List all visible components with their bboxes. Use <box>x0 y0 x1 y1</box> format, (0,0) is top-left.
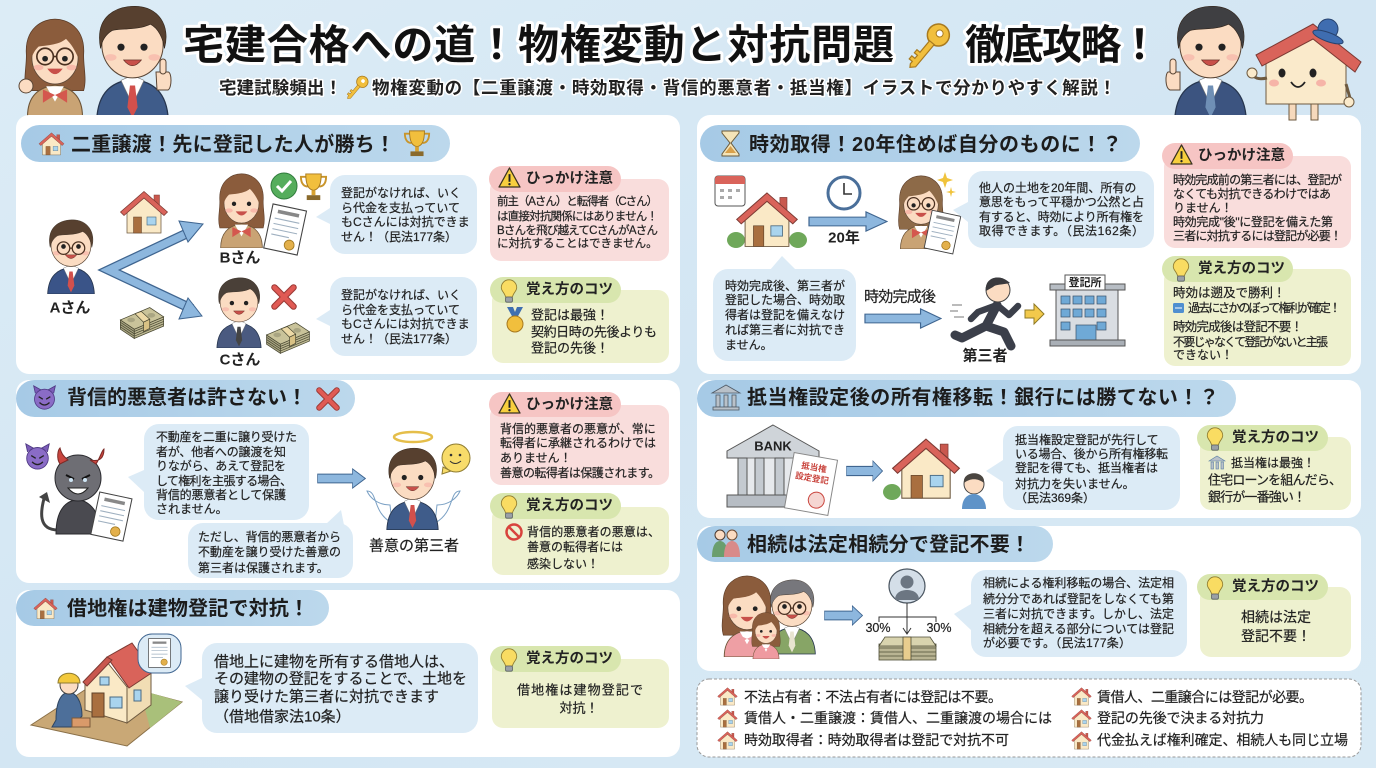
callout: memory tip: 背信的悪意者の悪意は、 <box>527 524 660 539</box>
speech bubble: exception <box>188 510 353 578</box>
callout: caution: なくても対抗できるわけではあ <box>1173 187 1331 201</box>
illustration: devil with certificate <box>26 444 132 541</box>
callout: memory tip: 借地権は建物登記で <box>517 682 643 698</box>
callout: memory tip <box>490 277 669 363</box>
speech bubble: inheritance rule: 相続による権利移転の場合、法定相 <box>983 575 1174 590</box>
callout: caution: 善意の転得者は保護されます。 <box>500 465 660 480</box>
title: 宅建合格への道！物権変動と対抗問題 <box>183 22 894 68</box>
callout: caution <box>489 166 669 261</box>
speech bubble: mortgage rule: （民法369条） <box>1015 491 1095 505</box>
speech bubble: bad-faith rule: 者が、他者への譲渡を知 <box>156 444 286 459</box>
speech bubble: mortgage rule: 抵当権設定登記が先行して <box>1015 432 1159 447</box>
callout: memory tip: 感染しない！ <box>527 556 599 571</box>
subtitle <box>219 74 1116 103</box>
diagram: statutory shares: 30% <box>926 621 952 635</box>
panel: summary list <box>697 679 1361 757</box>
icon: family <box>712 530 740 557</box>
list: left column <box>718 688 1052 749</box>
heading: inheritance <box>697 526 1053 562</box>
subtitle: 宅建試験頻出！ <box>219 78 342 98</box>
icon: smiling speech balloon <box>442 444 470 474</box>
speech bubble B: せん！（民法177条） <box>341 230 457 244</box>
illustration: worker and house on land <box>31 634 182 746</box>
heading: bad-faith party <box>16 380 355 417</box>
illustration: angel third party <box>367 432 470 554</box>
list: left column: 賃借人・二重譲渡：賃借人、二重譲渡の場合には <box>744 710 1052 726</box>
speech bubble: land lease rule: 借地上に建物を所有する借地人は、 <box>214 654 454 670</box>
speech bubble: bad-faith rule: りながら、あえて登記を <box>156 458 286 473</box>
icon: prohibited <box>506 524 522 540</box>
illustration: registry office <box>1050 275 1125 346</box>
illustration: mortgage document: 設定登記 <box>794 470 830 486</box>
arrow: to third party <box>865 309 941 328</box>
callout: caution <box>489 392 669 485</box>
subtitle: 物権変動の【二重譲渡・時効取得・背信的悪意者・抵当権】イラストで分かりやすく解説！ <box>372 78 1116 98</box>
speech bubble: land lease rule: 譲り受けた第三者に対抗できます <box>214 688 439 706</box>
diagram: statutory shares: 30% <box>865 621 891 635</box>
illustration: bank building: BANK <box>754 438 792 454</box>
callout: caution: 三者に対抗するには登記が必要！ <box>1173 228 1342 243</box>
speech bubble C: ら代金を支払っていて <box>341 303 460 317</box>
panel: mortgage <box>697 380 1361 518</box>
callout: memory tip: 覚え方のコツ <box>1232 577 1319 595</box>
arrow: bad-faith to third party <box>318 469 365 488</box>
callout: memory tip <box>490 493 669 575</box>
title: 徹底攻略！ <box>965 22 1160 68</box>
label: third party: 第三者 <box>962 346 1008 364</box>
speech bubble C: 登記がなければ、いく <box>341 287 461 302</box>
speech bubble: third party <box>713 256 856 361</box>
callout: caution: ありません！ <box>500 451 572 465</box>
speech bubble B <box>316 175 477 254</box>
panel: land lease <box>16 590 680 757</box>
callout: memory tip: 銀行が一番強い！ <box>1208 490 1306 504</box>
title <box>183 20 1160 75</box>
person B with certificate <box>219 173 326 266</box>
person A <box>48 220 94 316</box>
heading: land lease: 借地権は建物登記で対抗！ <box>67 597 309 620</box>
callout: caution: は直接対抗関係にはありません！ <box>497 209 658 223</box>
callout: memory tip <box>1197 574 1351 657</box>
speech bubble: third party: 登記した場合、時効取 <box>725 292 845 307</box>
heading: inheritance: 相続は法定相続分で登記不要！ <box>747 533 1030 556</box>
icon: key <box>902 20 954 75</box>
heading: land lease <box>16 590 329 626</box>
speech bubble: bad-faith rule <box>128 424 309 520</box>
speech bubble: third party: れば第三者に対抗でき <box>725 323 845 337</box>
heading: mortgage <box>697 380 1236 417</box>
panel: inheritance <box>697 526 1361 671</box>
callout: memory tip: 登記の先後！ <box>531 340 609 356</box>
speech bubble: land lease rule <box>185 643 478 733</box>
speech bubble: inheritance rule <box>954 570 1187 657</box>
speech bubble: land lease rule: （借地借家法10条） <box>214 708 351 726</box>
icon: clock <box>828 177 860 209</box>
diagram: statutory shares <box>865 569 952 660</box>
panel: prescription <box>697 115 1361 374</box>
person C with money <box>217 278 309 368</box>
speech bubble: prescription rule: 取得できます。（民法162条） <box>979 223 1144 238</box>
person C with money: Cさん <box>220 352 260 368</box>
list: left column: 不法占有者：不法占有者には登記は不要。 <box>744 689 1002 705</box>
callout: caution: ひっかけ注意 <box>1198 146 1285 164</box>
speech bubble: bad-faith rule: 不動産を二重に譲り受けた <box>156 430 297 444</box>
illustration: running third party <box>950 277 1018 346</box>
callout: certificate bubble <box>138 634 181 673</box>
speech bubble: third party: 得者は登記を備えなけ <box>725 307 845 322</box>
icon: small bank <box>1209 456 1225 469</box>
icon: house <box>120 192 168 233</box>
callout: memory tip: 時効は遡及で勝利！ <box>1173 285 1286 300</box>
speech bubble C: もCさんには対抗できま <box>341 317 470 331</box>
callout: caution: ひっかけ注意 <box>526 169 613 187</box>
list: right column: 代金払えば権利確定、相続人も同じ立場 <box>1097 732 1348 748</box>
icon: medal <box>507 307 523 332</box>
icon: money stack <box>879 637 936 660</box>
speech bubble B: もCさんには対抗できま <box>341 215 470 229</box>
callout: memory tip: 契約日時の先後よりも <box>531 324 657 340</box>
illustration: businessman at top right <box>1166 6 1246 120</box>
speech bubble: mortgage rule: 対抗力を失いません。 <box>1015 476 1135 491</box>
callout: memory tip: 登記は最強！ <box>531 308 609 322</box>
illustration: two students at top left <box>19 6 171 120</box>
callout: memory tip: 登記不要！ <box>1241 628 1311 644</box>
speech bubble: inheritance rule: が必要です。（民法177条） <box>983 635 1131 650</box>
callout: memory tip: 対抗！ <box>559 700 599 716</box>
person with certificate <box>899 172 961 254</box>
label: 20 years: 20年 <box>828 228 860 246</box>
speech bubble: third party: 時効完成後、第三者が <box>725 278 845 293</box>
icon: calendar <box>715 176 745 206</box>
callout: caution: 前主（Aさん）と転得者（Cさん） <box>497 194 658 208</box>
speech bubble C <box>316 277 477 356</box>
callout: memory tip: 相続は法定 <box>1241 609 1311 625</box>
icon: money <box>120 308 164 338</box>
speech bubble: prescription rule: 他人の土地を20年間、所有の <box>979 181 1136 195</box>
callout: caution: 時効完成"後"に登記を備えた第 <box>1173 214 1333 229</box>
callout: memory tip: 覚え方のコツ <box>1232 428 1319 446</box>
speech bubble: mortgage rule <box>986 426 1180 510</box>
callout: memory tip: 住宅ローンを組んだら、 <box>1208 472 1342 488</box>
icon: bank <box>712 385 740 410</box>
callout: caution: 転得者に承継されるわけでは <box>500 435 656 450</box>
speech bubble: prescription rule: 有すると、時効により所有権を <box>979 209 1144 224</box>
label: after completion: 時効完成後 <box>864 288 936 306</box>
speech bubble: inheritance rule: 続分分であれば登記をしなくても第 <box>983 591 1174 606</box>
callout: memory tip: 覚え方のコツ <box>526 280 613 298</box>
list: left column: 時効取得者：時効取得者は登記で対抗不可 <box>744 732 1009 748</box>
callout: caution: 背信的悪意者の悪意が、常に <box>500 421 656 436</box>
callout: memory tip <box>490 646 669 728</box>
callout: memory tip: 善意の転得者には <box>527 539 623 554</box>
callout: memory tip: 時効完成後は登記不要！ <box>1173 319 1303 334</box>
person A: Aさん <box>50 300 90 316</box>
speech bubble: third party: ません。 <box>725 338 773 352</box>
callout: memory tip: 不要じゃなくて登記がないと主張 <box>1173 334 1328 349</box>
icon: back arrow <box>1173 303 1184 313</box>
illustration: bank building <box>727 425 819 507</box>
callout: caution <box>1162 143 1351 248</box>
heading: bad-faith party: 背信的悪意者は許さない！ <box>67 386 307 409</box>
heading: prescription <box>700 125 1140 162</box>
icon: hourglass <box>722 131 739 156</box>
speech bubble B: 登記がなければ、いく <box>341 185 461 200</box>
list: right column <box>1072 688 1348 749</box>
callout: memory tip: 抵当権は最強！ <box>1231 455 1315 470</box>
arrows from A to B and C <box>109 221 203 319</box>
speech bubble: exception: 第三者は保護されます。 <box>198 560 329 575</box>
illustration: house with person <box>883 439 986 509</box>
list: right column: 登記の先後で決まる対抗力 <box>1097 710 1264 726</box>
speech bubble: prescription rule: 意思をもって平穏かつ公然と占 <box>979 194 1144 209</box>
speech bubble: exception: 不動産を譲り受けた善意の <box>198 544 341 559</box>
panel: bad-faith party <box>16 380 680 583</box>
speech bubble: inheritance rule: 相続分を超える部分については登記 <box>983 621 1174 636</box>
speech bubble: bad-faith rule: 背信的悪意者として保護 <box>156 487 286 502</box>
illustration: family <box>722 576 815 659</box>
panel: double transfer <box>16 115 680 374</box>
callout: caution: Bさんを飛び越えてCさんがAさん <box>497 223 658 237</box>
heading: prescription: 時効取得！20年住めば自分のものに！？ <box>749 133 1122 156</box>
arrow: bank to house <box>846 461 883 481</box>
speech bubble C: せん！（民法177条） <box>341 332 457 346</box>
speech bubble: mortgage rule: 登記を得ても、抵当権者は <box>1015 460 1158 475</box>
speech bubble B: ら代金を支払っていて <box>341 201 460 215</box>
callout: caution: 時効完成前の第三者には、登記が <box>1173 172 1342 187</box>
callout: memory tip: できない！ <box>1173 348 1233 362</box>
speech bubble: bad-faith rule: して権利を主張する場合、 <box>156 473 292 488</box>
speech bubble: land lease rule: その建物の登記をすることで、土地を <box>214 670 467 688</box>
illustration: angel third party: 善意の第三者 <box>369 538 459 554</box>
illustration: house mascot <box>1247 19 1361 120</box>
callout: memory tip <box>1162 256 1351 366</box>
list: right column: 賃借人、二重譲合には登記が必要。 <box>1097 689 1313 705</box>
illustration: house with bushes <box>727 193 807 248</box>
illustration: mortgage document: 抵当権 <box>801 460 828 474</box>
callout: memory tip: 過去にさかのぼって権利が確定！ <box>1188 300 1341 315</box>
heading: mortgage: 抵当権設定後の所有権移転！銀行には勝てない！？ <box>747 386 1219 409</box>
arrow: yellow <box>1025 304 1044 324</box>
callout: caution: に対抗することはできません。 <box>497 237 658 250</box>
callout: memory tip <box>1197 425 1351 510</box>
heading: double transfer: 二重譲渡！先に登記した人が勝ち！ <box>71 132 395 156</box>
speech bubble: bad-faith rule: されません。 <box>156 502 228 516</box>
arrow: to shares <box>824 606 863 625</box>
speech bubble: prescription rule <box>953 171 1154 248</box>
person B with certificate: Bさん <box>220 250 260 266</box>
icon: small key <box>344 74 370 103</box>
callout: memory tip: 覚え方のコツ <box>1198 259 1285 277</box>
illustration: mortgage document <box>784 453 838 515</box>
illustration: registry office: 登記所 <box>1068 275 1102 289</box>
callout: memory tip: 覚え方のコツ <box>526 496 613 514</box>
heading: double transfer <box>21 125 450 162</box>
callout: memory tip: 覚え方のコツ <box>526 649 613 667</box>
speech bubble: mortgage rule: いる場合、後から所有権移転 <box>1015 446 1168 461</box>
speech bubble: inheritance rule: 三者に対抗できます。しかし、法定 <box>983 607 1174 621</box>
callout: caution: ひっかけ注意 <box>526 395 613 413</box>
arrow: 20 years <box>809 212 887 231</box>
speech bubble: exception: ただし、背信的悪意者から <box>198 529 341 544</box>
callout: caution: りません！ <box>1173 201 1233 215</box>
